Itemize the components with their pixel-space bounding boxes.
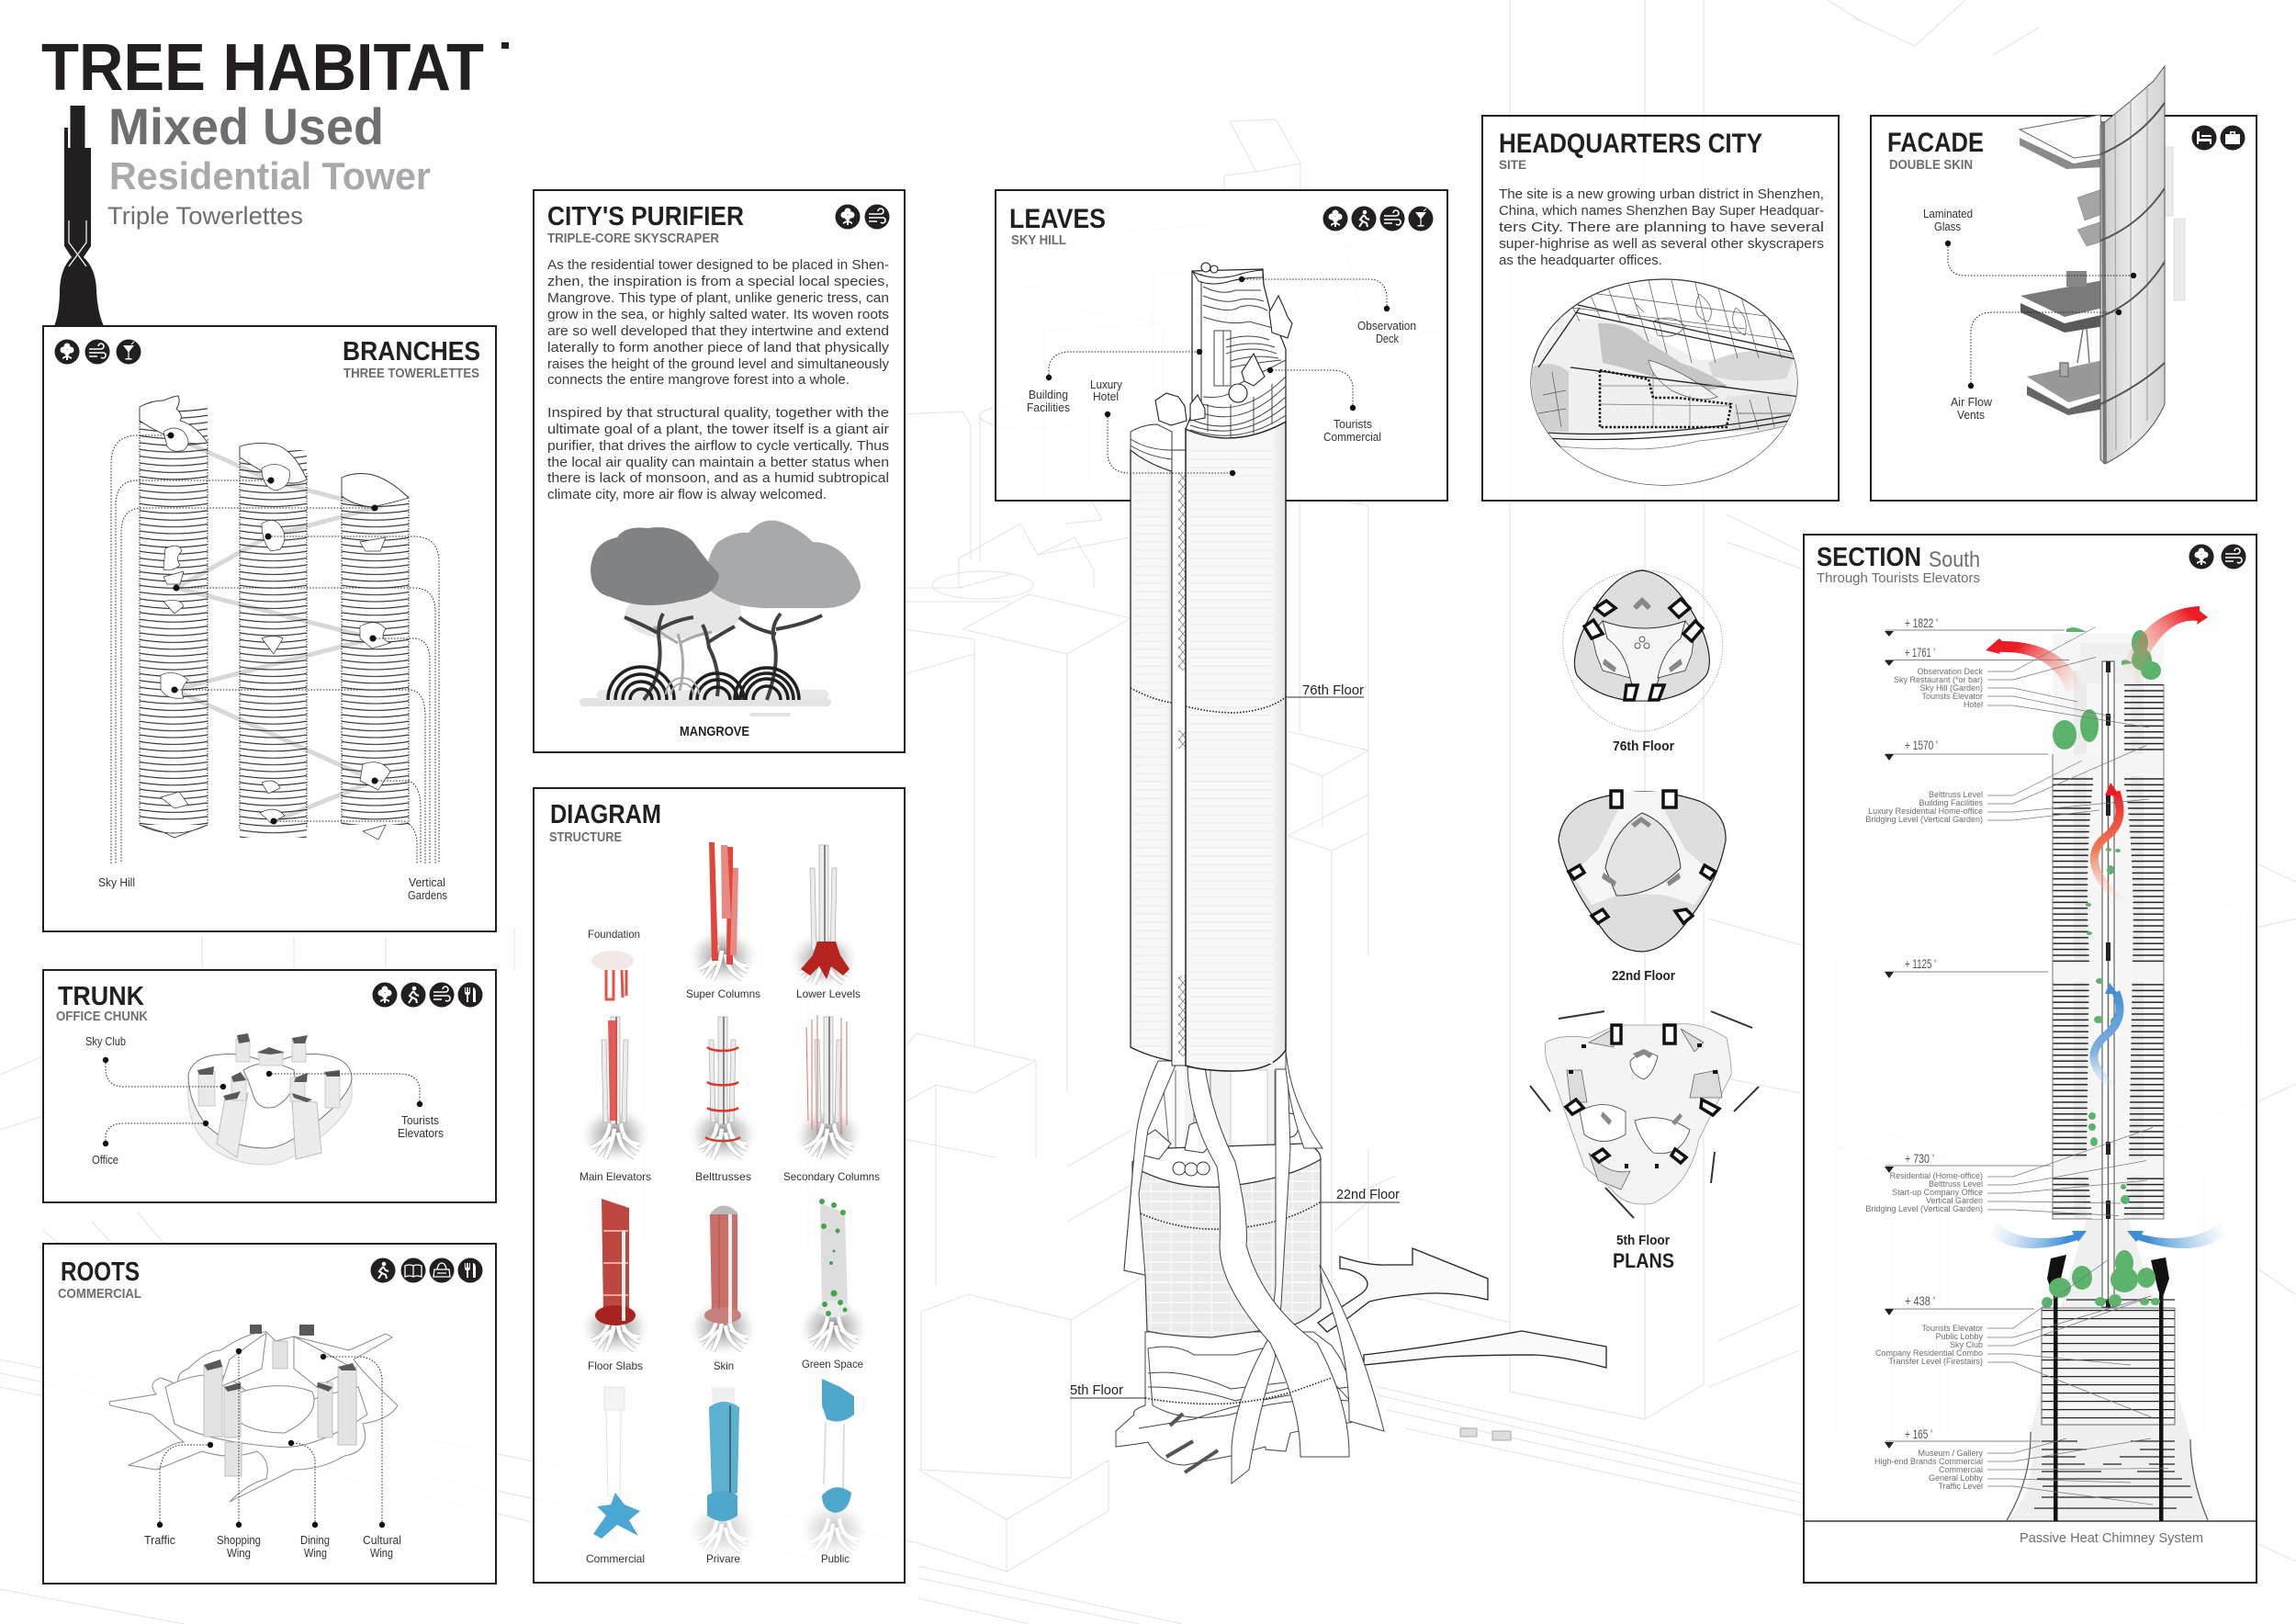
heading: facade: FACADE	[1887, 128, 1984, 158]
diagram item: foundation	[588, 928, 640, 999]
tower: middle towerlette	[240, 443, 307, 838]
diagram item: secondary columns: Secondary Columns	[783, 1170, 880, 1183]
street vehicles	[1460, 1428, 1511, 1440]
tower dotted section: 5th floor	[1145, 1378, 1332, 1404]
label: vertical gardens: Gardens	[408, 889, 447, 902]
labels: facade: Glass	[1934, 220, 1961, 233]
labels: roots: Shopping	[217, 1534, 261, 1547]
heading: branches: BRANCHES	[343, 337, 480, 367]
labels: leaves: Commercial	[1323, 431, 1381, 444]
labels: leaves: Facilities	[1027, 401, 1070, 414]
panel: diagram	[534, 788, 905, 1583]
drawing: commercial plates	[109, 1332, 398, 1502]
section: floor labels lower: Vertical Garden	[1926, 1196, 1983, 1205]
section: blue air arrows	[1986, 983, 2229, 1248]
label: vertical gardens: Vertical	[409, 876, 445, 889]
callout dots: facade	[1945, 241, 2136, 389]
labels: facade: Laminated	[1923, 208, 1973, 220]
diagram item: skin	[686, 1205, 760, 1372]
heading: headquarters city: HEADQUARTERS CITY	[1499, 129, 1762, 159]
icon: walker	[400, 983, 426, 1007]
label: vertical gardens	[408, 876, 447, 902]
diagram item: commercial	[586, 1387, 645, 1565]
diagram item: floor slabs: Floor Slabs	[588, 1359, 643, 1372]
divider line	[1804, 1520, 2257, 1522]
section: elevation markers: + 165 '	[1905, 1427, 1932, 1441]
icon: walker	[1352, 206, 1376, 231]
diagram item: secondary columns	[783, 1015, 880, 1183]
plan: 5th floor	[1530, 1011, 1759, 1248]
heading: city's purifier: CITY'S PURIFIER	[547, 202, 744, 231]
section: leader lines	[1987, 626, 2168, 1505]
icon: glass	[116, 340, 141, 364]
diagram item: foundation: Foundation	[588, 928, 640, 941]
interior columns between towers and podium	[1162, 1066, 1286, 1185]
labels: facade	[1923, 208, 1993, 422]
callout: 5th floor: 5th Floor	[1070, 1382, 1123, 1398]
illustration: mangrove trees	[580, 520, 861, 716]
title clipped mark	[501, 42, 509, 49]
panel: branches	[43, 326, 496, 931]
label: tourists elevators: Tourists	[401, 1114, 439, 1127]
title: TREE HABITAT	[41, 31, 484, 105]
diagram item: main elevators: Main Elevators	[580, 1170, 651, 1183]
labels: roots: Wing	[370, 1547, 393, 1560]
heading: leaves: LEAVES	[1009, 204, 1106, 234]
callout dots: leaves	[1046, 276, 1390, 476]
panel: leaves	[996, 190, 1447, 501]
icons: trunk	[373, 983, 483, 1007]
text block: concept paragraph 1: As the residential tower designed to be placed in Shen-	[547, 258, 889, 273]
tower dotted section: 76th floor	[1131, 688, 1286, 713]
section: floor labels lower: Commercial	[1939, 1465, 1983, 1474]
section: elevation markers: + 1125 '	[1905, 956, 1936, 971]
icons: roots	[371, 1258, 483, 1282]
diagram item: public	[797, 1379, 871, 1565]
section: floor labels lower: Public Lobby	[1935, 1332, 1983, 1341]
text block: site description: as the headquarter offices.	[1499, 254, 1662, 268]
heading: section south: SECTION	[1817, 543, 1921, 572]
labels: roots: Wing	[304, 1547, 327, 1560]
diagram item: belttrusses: Belttrusses	[695, 1170, 751, 1183]
section: floor labels lower: Company Residential Combo	[1875, 1348, 1983, 1358]
section: floor labels upper: Belttruss Level	[1929, 790, 1983, 799]
diagram item: super columns: Super Columns	[686, 987, 760, 1000]
labels: leaves: Hotel	[1093, 390, 1119, 403]
panel: section	[1804, 535, 2257, 1583]
text block: concept paragraph 1: raises the height of the ground level and simultaneously	[547, 357, 890, 372]
plan: 76th floor	[1563, 570, 1723, 754]
callout: 22nd floor: 22nd Floor	[1336, 1187, 1400, 1202]
section: floor labels lower: Traffic Level	[1938, 1482, 1983, 1491]
label: sky club: Sky Club	[85, 1035, 126, 1048]
text block: concept paragraph 2: climate city, more air flow is alway welcomed.	[547, 488, 827, 502]
icons: branches	[55, 340, 141, 364]
section: floor labels lower: High-end Brands Commercial	[1874, 1457, 1983, 1466]
diagram item: main elevators	[579, 1017, 652, 1183]
site map	[1531, 279, 1800, 487]
dotted leaders: facade	[1948, 243, 2133, 386]
text block: concept paragraph 2: the local air quality can maintain a better status when	[547, 456, 889, 470]
text block: concept paragraph 1: Mangrove. This type of plant, unlike generic tress, can	[547, 291, 889, 306]
label: 22nd floor: 22nd Floor	[1612, 968, 1675, 984]
diagram item: skin: Skin	[714, 1359, 734, 1372]
subheading: through tourists elevators: Through Tourists Elevators	[1817, 570, 1980, 586]
subtitle: triple towerlettes: Triple Towerlettes	[107, 202, 303, 230]
label: tourists elevators	[398, 1114, 444, 1140]
icon: tree	[1322, 206, 1348, 231]
dotted leaders: roots	[160, 1351, 382, 1525]
section: elevation markers: + 1570 '	[1905, 738, 1938, 752]
panel: facade	[1871, 116, 2257, 501]
labels: leaves: Deck	[1376, 333, 1400, 345]
left towerlette body	[1131, 424, 1186, 1066]
labels: leaves	[1027, 320, 1416, 444]
section: floor labels lower: Start-up Company Office	[1892, 1188, 1983, 1197]
icon: fork	[457, 1258, 483, 1282]
connector lines: grey bridges	[171, 435, 375, 821]
panel: trunk	[43, 970, 496, 1202]
subheading: office chunk: OFFICE CHUNK	[56, 1009, 148, 1024]
section: floor labels upper: Luxury Residential Home-office	[1868, 806, 1983, 816]
sky hill top	[1155, 263, 1292, 438]
icons: leaves	[1322, 206, 1433, 231]
heading: roots: ROOTS	[61, 1257, 140, 1287]
text block: concept paragraph 2: Inspired by that structural quality, together with the	[547, 406, 889, 421]
text block: site description: ters City. There are planning to have several	[1499, 220, 1824, 235]
plaza arms	[1318, 1248, 1606, 1368]
diagram item: green space	[796, 1199, 870, 1370]
icons: section	[2189, 544, 2246, 570]
labels: roots: Traffic	[144, 1534, 175, 1547]
subheading: three towerlettes: THREE TOWERLETTES	[343, 367, 479, 381]
diagram item: lower levels	[787, 845, 861, 1000]
columns: commercial cores	[204, 1325, 356, 1476]
icon: wind	[865, 204, 889, 230]
heading: section south: South	[1929, 547, 1980, 572]
section: floor labels upper: Building Facilities	[1919, 798, 1983, 807]
diagram item: green space: Green Space	[802, 1358, 863, 1370]
icon: briefcase	[2221, 125, 2245, 151]
escalators	[1166, 1414, 1218, 1472]
labels: roots: Cultural	[363, 1534, 401, 1547]
labels: roots	[144, 1534, 401, 1560]
diagram item: super columns	[686, 842, 760, 1000]
labels: roots: Dining	[300, 1534, 330, 1547]
text block: concept paragraph 2	[547, 406, 889, 502]
section: elevation markers: + 1761 '	[1905, 645, 1935, 660]
icon: wind	[2221, 544, 2246, 570]
section: floor labels lower: General Lobby	[1929, 1473, 1983, 1483]
section: floor labels lower: Residential (Home-office)	[1890, 1171, 1983, 1180]
section: floor labels upper: Hotel	[1964, 700, 1983, 709]
subheading: double skin: DOUBLE SKIN	[1889, 158, 1973, 173]
diagram item: commercial: Commercial	[586, 1552, 645, 1565]
label: 76th floor: 76th Floor	[1613, 739, 1674, 754]
labels: leaves: Observation	[1357, 320, 1416, 333]
section: floor labels lower: Belttruss Level	[1929, 1179, 1983, 1189]
main tower axonometric	[1046, 263, 1606, 1483]
text block: concept paragraph 1	[547, 258, 890, 388]
tower: left towerlette	[140, 396, 208, 838]
text block: site description: China, which names Shenzhen Bay Super Headquar-	[1499, 204, 1824, 219]
floor plans	[1530, 570, 1759, 1272]
label: sky hill: Sky Hill	[98, 876, 135, 889]
dotted leaders: leaves	[1049, 279, 1387, 473]
heading: diagram: DIAGRAM	[550, 800, 661, 829]
callout: 76th floor: 76th Floor	[1302, 682, 1364, 698]
text block: site description: The site is a new growing urban district in Shenzhen,	[1499, 187, 1824, 202]
text block: site description	[1499, 187, 1824, 268]
podium trunk	[1124, 1113, 1321, 1337]
plan: 22nd floor	[1559, 791, 1726, 984]
labels: leaves: Building	[1029, 389, 1068, 401]
section: floor labels upper: Sky Restaurant (*or bar)	[1894, 675, 1983, 684]
subtitle: residential tower: Residential Tower	[109, 154, 431, 197]
icon: wind	[1379, 206, 1405, 231]
diagram item: public: Public	[821, 1552, 850, 1565]
icon: tree	[373, 983, 397, 1007]
panel: roots	[43, 1244, 496, 1584]
tower: right towerlette	[342, 474, 409, 840]
section drawing: tower	[2007, 634, 2208, 1521]
caption: passive heat chimney: Passive Heat Chimney System	[2020, 1530, 2203, 1546]
icon: glass	[1409, 206, 1433, 231]
text block: concept paragraph 2: ultimate goal of a plant, the tower itself is a giant air	[547, 423, 889, 437]
labels: facade: Air Flow	[1951, 396, 1993, 409]
icon: fork	[457, 983, 483, 1007]
heading: plans: PLANS	[1613, 1249, 1674, 1272]
ribbon super columns	[1124, 1050, 1384, 1483]
drawing: facade double skin	[2020, 66, 2185, 464]
labels: leaves: Tourists	[1334, 418, 1372, 431]
text block: site description: super-highrise as well as several other skyscrapers	[1499, 237, 1824, 252]
text block: concept paragraph 1: are so well developed that they intertwine and extend	[547, 324, 889, 339]
labels: leaves: Luxury	[1090, 378, 1123, 391]
section: elevation markers: + 1822 '	[1905, 615, 1938, 630]
diagram item: floor slabs	[579, 1199, 652, 1372]
section: floor labels upper: Sky Hill (Garden)	[1919, 683, 1983, 693]
diagram item: lower levels: Lower Levels	[796, 987, 861, 1000]
icon: bag	[430, 1258, 454, 1282]
panel: headquarters city	[1482, 116, 1839, 501]
text block: concept paragraph 1: laterally to form another piece of land that physically	[547, 341, 890, 355]
section: floor labels upper: Observation Deck	[1917, 667, 1983, 676]
subheading: site: SITE	[1499, 157, 1526, 172]
subheading: structure: STRUCTURE	[549, 830, 622, 845]
subtitle: mixed used: Mixed Used	[108, 97, 384, 155]
text block: concept paragraph 1: connects the entire mangrove forest into a whole.	[547, 373, 850, 388]
subheading: sky hill: SKY HILL	[1011, 233, 1066, 248]
section: red air arrows	[1986, 606, 2208, 905]
labels: roots: Wing	[227, 1547, 251, 1560]
section: floor labels lower: Museum / Gallery	[1918, 1449, 1983, 1458]
section: floor labels upper: Bridging Level (Vertical Garden)	[1865, 815, 1983, 824]
text block: concept paragraph 2: purifier, that drives the airflow to cycle vertically. Thus	[547, 439, 889, 454]
label: office: Office	[92, 1154, 118, 1167]
icon: tower silhouette	[54, 106, 104, 326]
callout dots: roots	[157, 1348, 385, 1528]
icon: wind	[84, 340, 110, 364]
section: floor labels upper: Tourists Elevator	[1921, 692, 1983, 701]
section: elevation markers: + 438 '	[1905, 1293, 1935, 1308]
icon: tree	[836, 204, 860, 230]
section: floor labels lower: Transfer Level (Firestairs)	[1888, 1357, 1983, 1366]
text block: concept paragraph 2: there is lack of monsoon, and as a humid subtropical	[547, 471, 889, 486]
podium dotted section: 22nd floor	[1132, 1202, 1320, 1229]
diagram item: belttrusses	[686, 1017, 760, 1183]
section: floor labels lower	[1865, 1171, 1983, 1491]
panel: city's purifier	[534, 190, 905, 752]
icons: purifier	[836, 204, 889, 230]
section: green trees	[2042, 627, 2161, 1308]
label: tourists elevators: Elevators	[398, 1127, 444, 1140]
heading: trunk: TRUNK	[58, 982, 144, 1011]
section: floor labels upper	[1865, 667, 1983, 824]
icon: walker	[371, 1258, 395, 1282]
title block	[41, 31, 509, 326]
section: elevation markers: + 730 '	[1905, 1151, 1934, 1166]
dotted leaders: branches	[111, 435, 439, 863]
callout dots: trunk	[103, 1057, 422, 1146]
diagram item: privare	[686, 1387, 760, 1565]
section: floor labels lower: Bridging Level (Vertical Garden)	[1865, 1204, 1983, 1213]
icon: book	[400, 1258, 426, 1282]
icon: tree	[2189, 544, 2213, 570]
subheading: triple-core skyscraper: TRIPLE-CORE SKYSCRAPER	[547, 231, 719, 246]
callout dots: branches	[167, 432, 378, 825]
drawing: office chunk floor	[188, 1033, 352, 1165]
subheading: commercial: COMMERCIAL	[58, 1287, 141, 1302]
text block: concept paragraph 1: zhen, the inspiration is from a special local species,	[547, 275, 889, 289]
section: elevation markers	[1885, 615, 2069, 1449]
section: floor labels lower: Tourists Elevator	[1921, 1324, 1983, 1333]
icon: tree	[55, 340, 79, 364]
caption: mangrove: MANGROVE	[680, 725, 749, 739]
icon: bed	[2191, 125, 2217, 151]
dotted leaders: trunk	[106, 1060, 420, 1144]
icons: facade	[2191, 125, 2245, 151]
label: 5th floor: 5th Floor	[1616, 1233, 1670, 1248]
labels: facade: Vents	[1957, 409, 1985, 422]
text block: concept paragraph 1: grow in the sea, or highly salted water. Its woven roots	[547, 308, 889, 322]
right towerlette body	[1186, 422, 1286, 1071]
diagram item: privare: Privare	[706, 1552, 740, 1565]
icon: wind	[430, 983, 454, 1007]
lower commercial plates	[1116, 1332, 1366, 1465]
section: floor labels lower: Sky Club	[1950, 1340, 1983, 1349]
